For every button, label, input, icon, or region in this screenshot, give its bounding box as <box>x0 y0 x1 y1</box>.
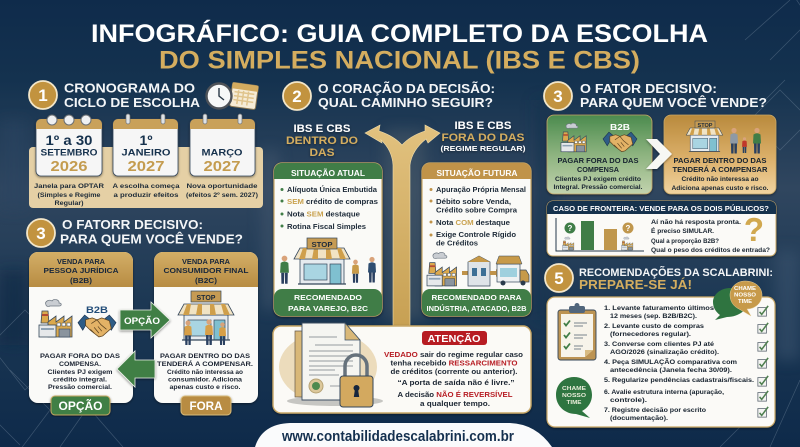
panel: situação futura: de Créditos <box>436 238 478 248</box>
date captions: Janela para OPTAR <box>34 183 104 190</box>
label: fora do DAS <box>440 120 526 153</box>
checklist text: 6. Avalie estrutura interna (apuração, <box>604 389 724 396</box>
label: fora do DAS: IBS E CBS <box>454 120 512 132</box>
callout: chame nosso time left: TIME <box>566 400 582 406</box>
panel: venda B2C: STOP <box>196 295 216 302</box>
panel: venda B2B: (B2B) <box>70 278 92 285</box>
panel: situação futura: Nota COM destaque <box>436 218 510 227</box>
panel: situação atual: PARA VAREJO, B2C <box>288 304 369 313</box>
panel: B2C gold <box>664 115 776 194</box>
panel: venda B2B: PESSOA JURÍDICA <box>44 266 118 275</box>
panel: situação atual: Nota SEM destaque <box>287 210 360 218</box>
panel: B2B green: Integral. Pressão comercial. <box>554 184 643 191</box>
attention text: de créditos (corrente ou anterior). <box>390 369 518 376</box>
checklist text: (fornecedores regular). <box>610 331 691 338</box>
checklist text: (documentação). <box>610 415 668 422</box>
label: dentro do DAS: DAS <box>310 147 334 159</box>
panel: caso de fronteira <box>547 201 776 256</box>
arrow: opção right: OPÇÃO <box>124 316 160 327</box>
title: DO SIMPLES NACIONAL (IBS E CBS) <box>159 46 640 74</box>
panel: B2C gold: Crédito não interessa ao <box>682 176 759 183</box>
panel: caso de fronteira: Qual o peso dos créditos de entrada? <box>651 247 770 254</box>
heading fator decisivo: O FATORR DECISIVO: <box>62 218 203 232</box>
panel: B2B green: B2B <box>610 123 630 132</box>
panel: B2B green: Clientes PJ exigem crédito <box>555 176 641 183</box>
label: dentro do DAS: IBS E CBS <box>294 123 350 135</box>
section 2: coração da decisão <box>273 81 531 413</box>
date card: setembro 2026: SETEMBRO <box>40 148 98 158</box>
date captions: A escolha começa <box>112 183 180 190</box>
panel: B2B green: COMPENSA <box>577 167 619 174</box>
panel: situação futura: RECOMENDADO PARA <box>432 293 522 302</box>
panel: situação futura: Débito sobre Venda, <box>436 197 511 206</box>
checklist text: 12 meses (sep. B2B/B2C). <box>610 313 697 320</box>
date captions <box>34 183 258 207</box>
date captions: (Simples e Regime <box>38 192 101 199</box>
checklist text: 5. Regularize pendências cadastrais/fiscais. <box>604 377 754 384</box>
checklist text: 3. Converse com clientes PJ até <box>604 341 714 348</box>
callout: chame nosso time top <box>713 281 762 320</box>
panel: atenção <box>273 323 531 413</box>
heading cronograma <box>64 82 200 110</box>
callout: chame nosso time left: NOSSO <box>562 393 587 399</box>
title <box>91 19 708 74</box>
panel: situação futura <box>422 163 531 316</box>
panel: caso de fronteira: Qual a proporção B2B? <box>651 238 719 245</box>
title: INFOGRÁFICO: GUIA COMPLETO DA ESCOLHA <box>91 19 708 48</box>
attention text: tenha recebido RESSARCIMENTO <box>390 360 518 368</box>
heading fator decisivo: PARA QUEM VOCÊ VENDE? <box>60 232 243 246</box>
panel: situação atual: Alíquota Única Embutida <box>287 185 378 194</box>
date card: janeiro 2027 <box>113 114 178 176</box>
timeline band <box>29 147 263 208</box>
attention text <box>384 352 523 408</box>
chart: comparison bars <box>556 218 644 251</box>
badge 1: 1 <box>38 86 48 105</box>
heading right: PARA QUEM VOCÊ VENDE? <box>580 95 767 110</box>
panel: situação atual <box>274 163 382 316</box>
panel: B2B green: PAGAR FORA DO DAS <box>558 158 639 165</box>
badge: fora <box>181 396 231 415</box>
date card: março 2027 <box>190 114 255 176</box>
attention text: VEDADO sair do regime regular caso <box>384 352 523 359</box>
panel: venda B2C: VENDA PARA <box>182 259 230 266</box>
panel: B2C gold: STOP <box>698 123 713 129</box>
icon: clipboard <box>558 303 596 360</box>
footer website: www.contabilidadescalabrini.com.br <box>281 429 514 445</box>
label: fora do DAS: (REGIME REGULAR) <box>440 144 526 153</box>
checklist text: antecedência (Janela fecha 30/09). <box>610 367 732 374</box>
badge 3 <box>27 219 55 247</box>
badge: opção <box>51 396 110 415</box>
badge label: atenção: ATENÇÃO <box>428 332 481 345</box>
label: dentro do DAS: DENTRO DO <box>286 135 358 147</box>
panel: B2C gold: Adiciona apenas custo e risco. <box>672 185 769 192</box>
arrow: white chevron <box>646 139 672 169</box>
heading coração: O CORAÇÃO DA DECISÃO: <box>318 81 495 96</box>
heading right: O FATOR DECISIVO: <box>580 82 717 96</box>
arrow: left <box>117 351 155 387</box>
checklist text: 7. Registre decisão por escrito <box>604 407 706 414</box>
panel: venda B2C: PAGAR DENTRO DO DAS <box>160 353 251 360</box>
callout: chame nosso time top: CHAME <box>734 286 757 292</box>
panel: situação futura: Crédito sobre Compra <box>436 206 518 214</box>
badge 1 <box>29 81 57 109</box>
panel: venda B2B: Pressão comercial. <box>48 384 112 391</box>
panel: situação futura: SITUAÇÃO FUTURA <box>436 169 518 178</box>
heading right <box>580 82 767 110</box>
checklist text: 1. Levante faturamento últimos <box>604 305 714 312</box>
attention text: A decisão NÃO É REVERSÍVEL <box>398 390 513 399</box>
section 3 right: fator decisivo <box>544 82 776 256</box>
panel: caso de fronteira: Aí não há resposta pronta. <box>651 219 741 226</box>
section 3 left: fator decisivo <box>27 218 258 415</box>
icons: check boxes <box>758 306 768 417</box>
heading cronograma: CRONOGRAMA DO <box>64 82 195 96</box>
date captions: a produzir efeitos <box>114 192 179 199</box>
panel: venda B2C: TENDERÁ A COMPENSAR. <box>157 359 253 368</box>
panel: venda B2B: B2B <box>86 305 109 315</box>
panel: venda B2C: (B2C) <box>195 278 217 285</box>
attention text: a qualquer tempo. <box>420 401 490 408</box>
badge 3 right: 3 <box>553 87 563 106</box>
checklist text: 2. Levante custo de compras <box>604 323 704 330</box>
attention text: “A porta de saída não é livre.” <box>398 380 514 387</box>
heading recomendações <box>579 266 773 292</box>
panel: venda B2C: Crédito não interessa ao <box>167 369 243 376</box>
badge 2: 2 <box>292 87 302 106</box>
panel: situação atual: Rotina Fiscal Simples <box>287 222 366 231</box>
checklist text: AGO/2026 (sinalização crédito). <box>610 349 719 356</box>
checklist text: controle). <box>610 397 647 404</box>
date card: março 2027: MARÇO <box>202 148 242 158</box>
panel: situação futura: Apuração Própria Mensal <box>436 185 526 194</box>
arrow: fork road <box>365 125 440 326</box>
date card: março 2027: 2027 <box>204 158 240 175</box>
label: fora do DAS: FORA DO DAS <box>442 132 524 144</box>
checklist text: 4. Peça SIMULAÇÃO comparativa com <box>604 357 737 366</box>
panel: caso de fronteira: CASO DE FRONTEIRA: VENDE PARA OS DOIS PÚBLICOS? <box>553 204 769 213</box>
arrow: opção right <box>120 302 170 338</box>
section 1: cronograma <box>29 81 263 208</box>
icon: document with padlock <box>279 323 383 407</box>
heading coração <box>318 81 495 110</box>
panel: venda B2B: VENDA PARA <box>57 259 105 266</box>
callout: chame nosso time left <box>556 377 592 418</box>
callout: chame nosso time left: CHAME <box>562 386 586 392</box>
checklist text <box>604 305 754 422</box>
callout: chame nosso time top: TIME <box>738 299 753 305</box>
badge 3: 3 <box>36 224 46 243</box>
icon: question mark: ? <box>744 211 764 248</box>
badge 2 <box>283 82 311 110</box>
panel: situação atual: STOP <box>312 242 333 249</box>
panel: venda B2B: PAGAR FORA DO DAS <box>40 353 121 360</box>
date card: janeiro 2027: 1º <box>140 132 152 148</box>
panel: checklist <box>547 297 775 427</box>
date card: setembro 2026: 2026 <box>50 158 88 175</box>
badge: opção: OPÇÃO <box>58 400 103 413</box>
panel: venda B2B <box>29 252 133 403</box>
callout: chame nosso time top: NOSSO <box>734 292 756 298</box>
date captions: Regular) <box>54 200 84 207</box>
panel: venda B2B: crédito integral. <box>53 376 107 384</box>
panel: situação atual: SEM crédito de compras <box>287 197 378 206</box>
section 5: recomendações <box>545 264 775 427</box>
badge 3 right <box>544 82 572 110</box>
panel: situação futura: Exige Controle Rígido <box>436 230 517 239</box>
badge 5 <box>545 264 573 292</box>
heading recomendações: RECOMENDAÇÕES DA SCALABRINI: <box>579 266 773 279</box>
panel: venda B2C: apenas custo e risco. <box>170 384 241 391</box>
date card: setembro 2026: 1º a 30 <box>46 132 93 148</box>
panel: venda B2C: consumidor. Adiciona <box>168 376 242 384</box>
badge: atenção <box>422 331 487 345</box>
date card: janeiro 2027: JANEIRO <box>122 148 170 158</box>
panel: B2C gold: TENDERÁ A COMPENSAR <box>672 165 768 174</box>
chart: comparison bars: ? <box>626 224 631 233</box>
heading cronograma: CICLO DE ESCOLHA <box>64 96 200 110</box>
panel: B2B green <box>547 115 652 194</box>
footer band <box>255 423 552 447</box>
date card: janeiro 2027: 2027 <box>128 158 164 175</box>
panel: venda B2C: CONSUMIDOR FINAL <box>164 268 249 275</box>
panel: caso de fronteira: É preciso SIMULAR. <box>651 226 714 235</box>
label: dentro do DAS <box>286 123 358 159</box>
panel: venda B2B: COMPENSA. <box>59 361 101 368</box>
date card: setembro 2026 <box>36 115 102 176</box>
icon: clock and calendar <box>206 82 259 110</box>
panel: venda B2B: Clientes PJ exigem <box>48 369 113 376</box>
panel: situação atual: SITUAÇÃO ATUAL <box>291 169 365 178</box>
date captions: Nova oportunidade <box>186 183 258 190</box>
panel: venda B2C <box>154 252 258 403</box>
badge: fora: FORA <box>190 401 222 413</box>
badge 5: 5 <box>554 269 564 288</box>
panel: B2C gold: PAGAR DENTRO DO DAS <box>674 158 767 165</box>
chart: comparison bars: ? <box>568 224 573 233</box>
heading recomendações: PREPARE-SE JÁ! <box>579 277 692 292</box>
panel: situação atual: RECOMENDADO <box>294 293 362 302</box>
heading fator decisivo <box>60 218 243 246</box>
heading coração: QUAL CAMINHO SEGUIR? <box>318 96 493 110</box>
date captions: (efeitos 2º sem. 2027) <box>186 192 258 199</box>
panel: situação futura: INDÚSTRIA, ATACADO, B2B <box>426 304 527 313</box>
